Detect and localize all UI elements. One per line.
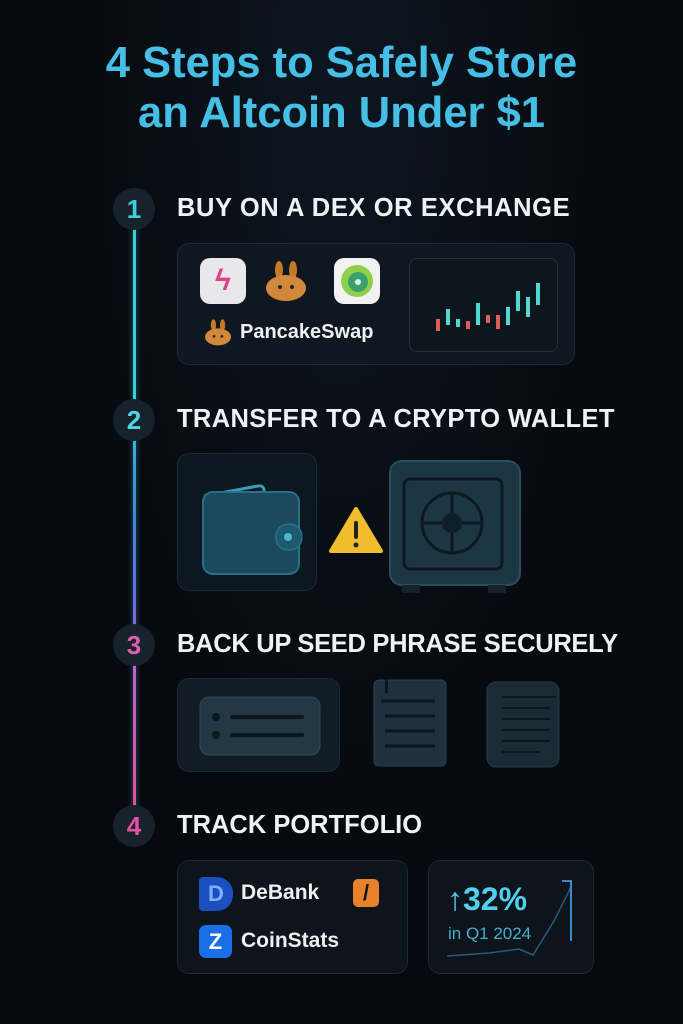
icon: bunny [266,261,306,301]
icon: document [374,679,446,766]
icon: coinstats [199,925,232,958]
step 4 number: 4 [127,811,141,841]
step 4 number [113,805,155,847]
title: an Altcoin Under $1 [138,89,545,137]
stat value: ↑32% [447,881,527,917]
icon: warning [329,506,384,553]
icon: card [200,696,320,756]
icon: notebook [486,682,560,768]
stat caption: in Q1 2024 [448,924,531,943]
chart: candlesticks [409,258,558,352]
panel: exchanges [177,243,575,365]
icon: safe [389,460,521,593]
icon: pink app: ϟ [215,264,231,297]
step 1 number [113,188,155,230]
icon: wallet [202,484,302,575]
panel: stat [428,860,594,974]
step 3 number [113,624,155,666]
step 1 heading: BUY ON A DEX OR EXCHANGE [177,194,570,222]
step 2 number: 2 [127,405,141,435]
step 1 number: 1 [127,194,141,224]
step 2 heading: TRANSFER TO A CRYPTO WALLET [177,405,615,433]
pancakeswap label [205,319,373,346]
icon: coinstats: Z [209,929,222,954]
icon: green app [334,258,380,304]
panel: wallet [177,453,317,591]
panel: trackers [177,860,408,974]
title: 4 Steps to Safely Store [106,39,577,87]
debank label: DeBank [241,881,319,904]
step 4 heading: TRACK PORTFOLIO [177,811,422,839]
step 2 number [113,399,155,441]
pancakeswap label: PancakeSwap [240,321,373,343]
step 3 number: 3 [127,630,141,660]
panel: seed card [177,678,340,772]
icon: pink app [200,258,246,304]
icon: debank: D [208,881,224,906]
icon: orange [353,879,379,907]
coinstats label: CoinStats [241,929,339,952]
icon: orange: / [363,880,369,905]
line chart [447,880,572,957]
timeline line [133,228,136,808]
title [106,39,577,137]
icon: debank [199,877,233,911]
step 3 heading: BACK UP SEED PHRASE SECURELY [177,630,618,658]
